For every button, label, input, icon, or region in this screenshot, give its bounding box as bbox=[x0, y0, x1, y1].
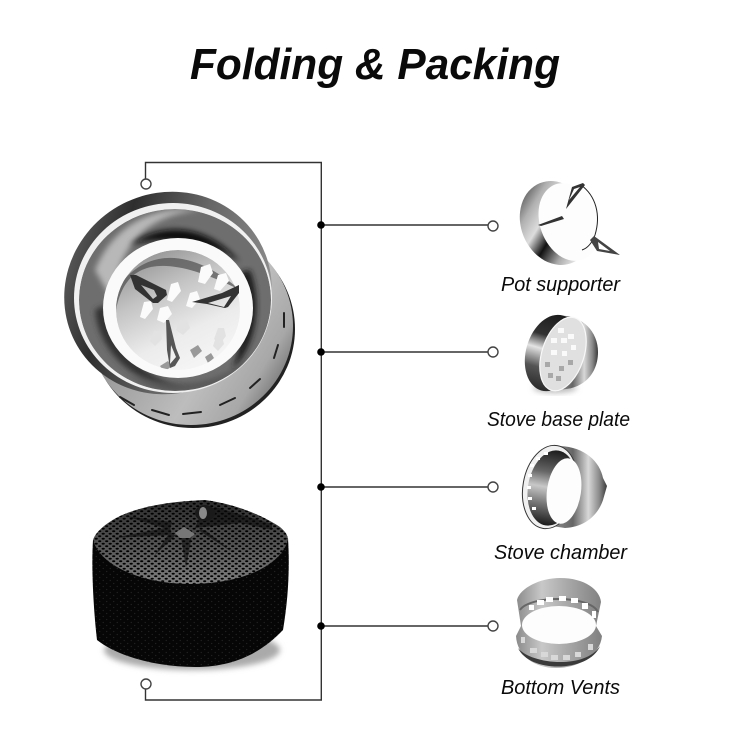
main stove assembled bbox=[64, 192, 295, 428]
vents back wall edge bbox=[520, 599, 598, 612]
bracket line bbox=[146, 162, 321, 700]
vents bottom rim bbox=[518, 646, 600, 667]
node: main stove bbox=[141, 179, 151, 189]
end circles bbox=[488, 221, 498, 631]
junction dots bbox=[317, 221, 325, 630]
vents body bbox=[516, 578, 602, 668]
chamber vent holes bbox=[527, 452, 548, 510]
connector nodes bbox=[141, 179, 498, 689]
base plate disc bbox=[531, 311, 595, 397]
mesh texture bbox=[93, 500, 288, 584]
stove floor with vent holes bbox=[116, 250, 240, 372]
base plate holes bbox=[551, 328, 576, 356]
infographic bbox=[64, 48, 630, 701]
base plate shadow bbox=[533, 383, 577, 393]
bag top bbox=[93, 500, 288, 584]
title: Folding & Packing bbox=[190, 40, 560, 89]
label: pot supporter: Pot supporter bbox=[501, 274, 621, 296]
vents lower slots bbox=[521, 637, 593, 660]
drawstring centre bbox=[175, 527, 195, 538]
white ring bbox=[103, 238, 253, 378]
cord lock bbox=[195, 505, 215, 521]
drawstring folds bbox=[112, 507, 272, 568]
connector: bottom vents bbox=[321, 625, 488, 627]
bag shadow bbox=[104, 630, 280, 670]
chamber front ring bbox=[516, 441, 584, 533]
connector: stove chamber bbox=[321, 486, 488, 488]
connector: pot supporter bbox=[321, 224, 488, 226]
label: stove chamber: Stove chamber bbox=[494, 542, 628, 564]
mesh bag bbox=[92, 500, 289, 670]
bag side bbox=[92, 538, 289, 667]
vents upper slots bbox=[529, 596, 596, 618]
base plate left wall bbox=[516, 308, 588, 398]
connector: stove base plate bbox=[321, 351, 488, 353]
diamond holes bbox=[140, 264, 229, 323]
bowl highlights and shadows bbox=[95, 209, 200, 300]
part: stove base plate bbox=[516, 308, 598, 398]
chamber outer wall bbox=[545, 446, 607, 528]
supporter opening bbox=[528, 174, 610, 270]
label: bottom vents: Bottom Vents bbox=[501, 677, 620, 699]
connector lines bbox=[146, 162, 488, 700]
base plate right wall bbox=[552, 315, 598, 389]
node: mesh bag bbox=[141, 679, 151, 689]
supporter rim bbox=[507, 170, 605, 276]
part: stove chamber bbox=[516, 441, 607, 533]
vents opening bbox=[522, 606, 596, 644]
stove body bbox=[89, 227, 295, 428]
supporter prongs bbox=[538, 183, 620, 255]
part: pot supporter bbox=[507, 170, 620, 276]
supporter edge bbox=[581, 185, 597, 250]
rim highlight bbox=[74, 203, 272, 393]
outer rim bbox=[27, 154, 309, 432]
chamber opening bbox=[543, 456, 585, 526]
label: stove base plate: Stove base plate bbox=[487, 409, 630, 431]
part: bottom vents bbox=[516, 578, 602, 668]
pot support prongs bbox=[130, 275, 239, 368]
body vents bbox=[120, 313, 284, 415]
inner bowl bbox=[79, 209, 271, 391]
